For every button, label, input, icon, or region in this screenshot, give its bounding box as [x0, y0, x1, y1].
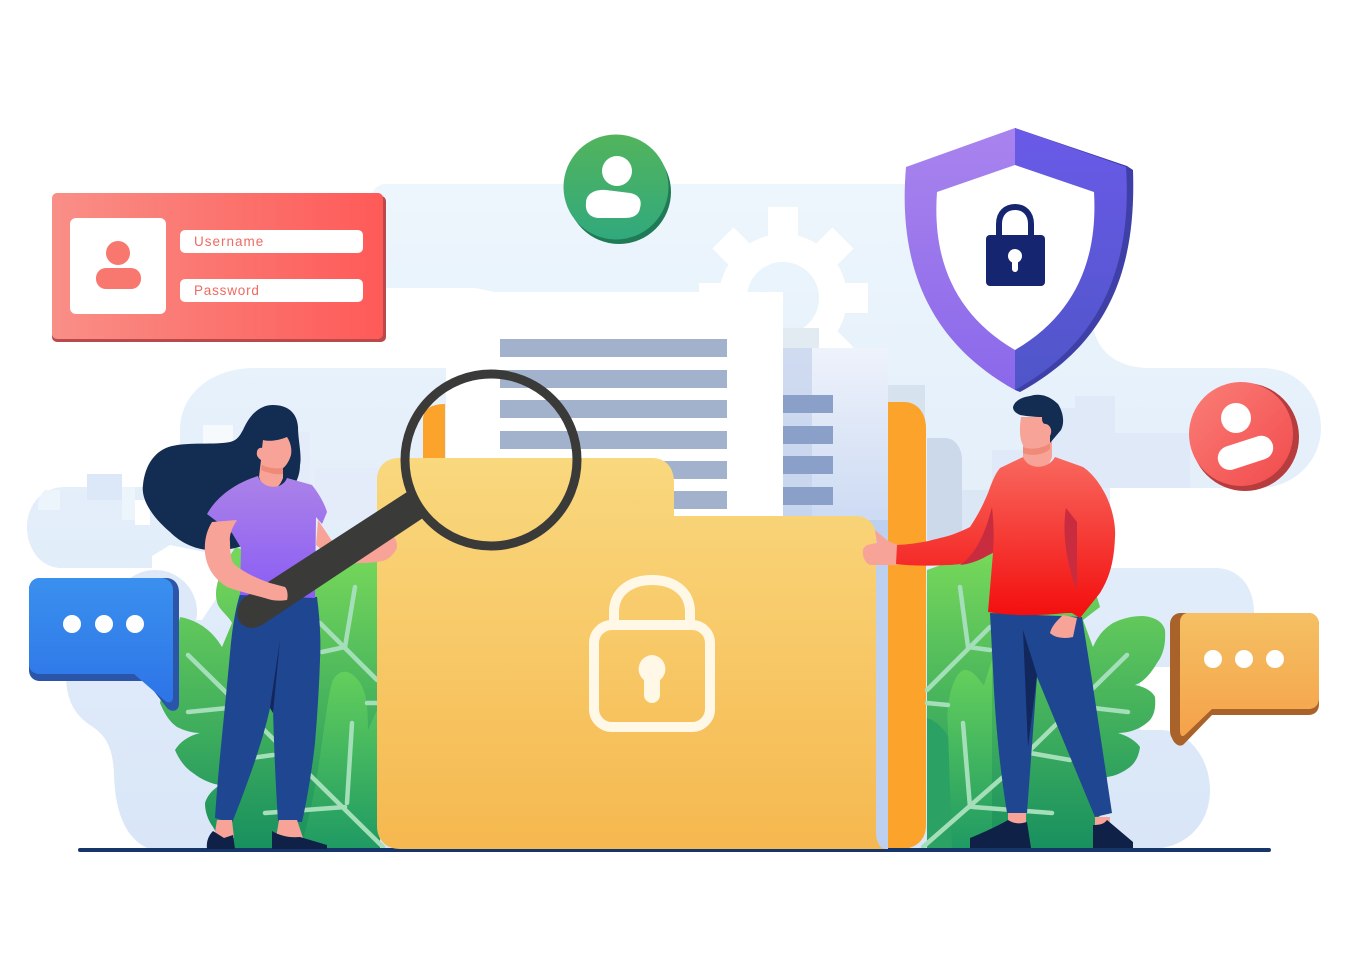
shield	[905, 128, 1133, 392]
back sheet document	[783, 328, 888, 850]
right arm	[316, 520, 397, 564]
back folder panel	[888, 402, 926, 849]
icon: user avatar	[96, 241, 141, 289]
green gap behind arm	[1077, 522, 1083, 590]
woman left arm and hand	[205, 520, 288, 601]
ankles	[214, 820, 303, 838]
neck and face	[257, 437, 291, 489]
trousers	[990, 613, 1112, 817]
trousers	[215, 594, 320, 823]
username field	[180, 230, 363, 253]
magnifying glass	[237, 374, 577, 628]
orange speech bubble	[1170, 613, 1319, 746]
icon: folder padlock	[594, 580, 710, 727]
ground line	[78, 848, 1271, 852]
red user badge	[1189, 382, 1299, 491]
folder front	[377, 458, 888, 849]
sleeve shadows	[960, 507, 1077, 590]
ankles	[1008, 813, 1110, 826]
green user badge	[564, 134, 671, 244]
sweater	[896, 457, 1115, 618]
hand in pocket	[1050, 615, 1077, 638]
left hand	[863, 530, 898, 565]
left plant	[160, 548, 383, 849]
background blobs	[27, 184, 1321, 849]
login card	[52, 193, 386, 342]
blue speech bubble	[29, 578, 179, 711]
password field: Password	[194, 283, 260, 298]
icon: shield padlock	[986, 207, 1045, 286]
background city silhouette	[38, 385, 1190, 540]
shoes	[207, 831, 327, 849]
left orange tab	[423, 404, 445, 470]
gear	[699, 207, 868, 389]
hair	[1013, 395, 1063, 443]
shoes	[970, 820, 1133, 848]
shirt	[207, 476, 327, 598]
hair	[143, 405, 301, 550]
man figure	[863, 395, 1133, 848]
woman figure	[143, 405, 397, 849]
password field	[180, 279, 363, 302]
front sheet document	[446, 288, 783, 530]
left gear	[113, 545, 218, 654]
right plant	[923, 550, 1165, 849]
username field: Username	[194, 234, 264, 249]
neck and face	[1020, 417, 1052, 472]
